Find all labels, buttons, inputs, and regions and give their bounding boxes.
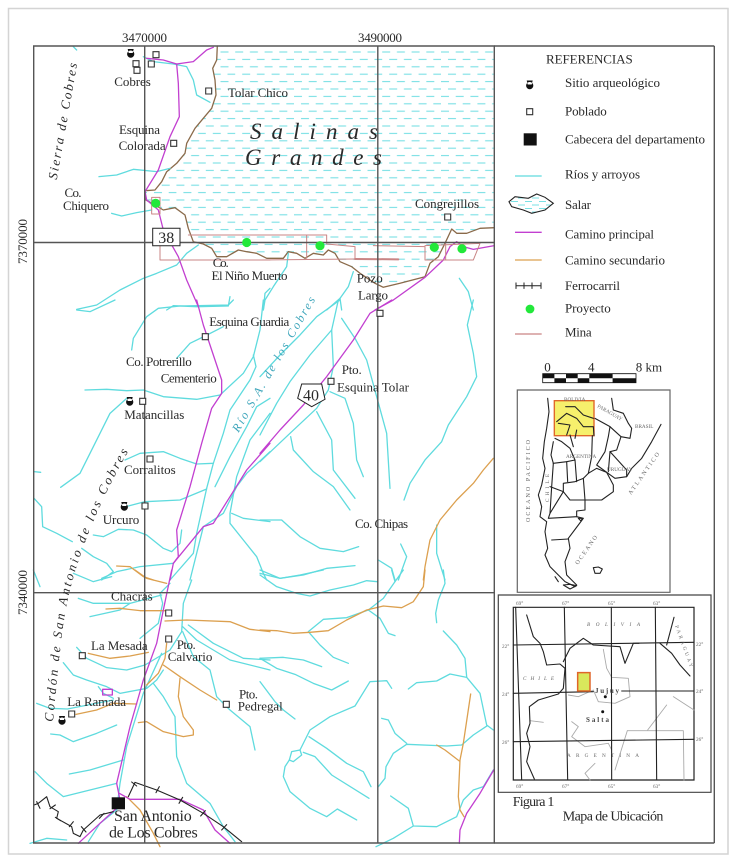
place names: Tolar Chico <box>228 85 288 100</box>
legend: Sitio arqueológico <box>565 75 660 90</box>
place names: Urcuro <box>103 512 139 527</box>
place names: 7340000 <box>15 570 30 615</box>
place names: Co. <box>213 255 229 270</box>
place names: Chiquero <box>63 198 109 213</box>
place names: La Mesada <box>91 638 148 653</box>
place names: Largo <box>358 287 388 302</box>
inset map: Argentina <box>517 390 670 592</box>
place names: Matancillas <box>124 407 184 422</box>
place names: Chacras <box>111 589 153 604</box>
secondary roads <box>76 458 493 847</box>
inset map: Argentina: OCEANO <box>575 534 600 566</box>
inset map: location detail: 22° <box>696 641 703 648</box>
place names: 3470000 <box>122 30 167 45</box>
place names <box>15 30 479 841</box>
place names: Pto. <box>342 362 362 377</box>
place names: Co. Chipas <box>355 516 408 531</box>
place names: Esquina Tolar <box>337 380 410 395</box>
inset map: location detail: Salta <box>586 716 610 724</box>
department capital marker <box>112 797 125 809</box>
place names: Calvario <box>168 649 212 664</box>
place names: Congrejillos <box>415 196 479 211</box>
range and river names: Río S.A. de los Cobres <box>228 294 318 435</box>
place names: El Niño Muerto <box>212 268 288 283</box>
inset map: location detail: 65° <box>608 783 615 790</box>
salar shoreline <box>145 46 494 287</box>
inset map: Argentina: PARAGUAY <box>596 404 623 423</box>
range and river names: Sierra de Cobres <box>45 62 80 181</box>
place names: Esquina Guardia <box>209 314 290 329</box>
inset map: Argentina: URUGUAY <box>607 467 633 473</box>
place names: Colorada <box>119 138 166 153</box>
place names: de Los Cobres <box>109 824 198 841</box>
salar: Salinas Grandes <box>145 46 494 287</box>
legend: Mina <box>565 325 592 340</box>
salt flat name: Grandes <box>245 145 382 170</box>
settlements <box>69 52 451 717</box>
place names: Co. <box>64 185 82 200</box>
inset map: Argentina: ARGENTINA <box>566 454 597 460</box>
place names: Pto. <box>177 637 196 652</box>
inset map: location detail: 65° <box>608 600 615 607</box>
salt flat name: Salinas <box>250 119 378 144</box>
legend: Camino principal <box>565 226 654 241</box>
place names: La Ramada <box>67 694 126 709</box>
range and river names: Cordón de San Antonio de los Cobres <box>45 449 128 721</box>
place names: 3490000 <box>358 30 402 45</box>
route 38 marker: 38 <box>158 230 174 247</box>
place names: Esquina <box>119 122 160 137</box>
inset map: location detail: 67° <box>562 783 569 790</box>
place names: Corralitos <box>124 462 176 477</box>
inset map: Argentina: CHILE <box>545 474 551 502</box>
legend: Camino secundario <box>565 252 665 267</box>
project points <box>151 199 467 253</box>
inset map: location detail: CHILE <box>523 676 555 682</box>
scale bar: 0 <box>544 360 551 375</box>
legend <box>509 51 705 340</box>
legend: Cabecera del departamento <box>565 131 705 146</box>
place names: Cobres <box>114 74 151 89</box>
legend: Proyecto <box>565 300 611 315</box>
scale bar: 8 km <box>636 360 662 375</box>
place names: Pozo <box>357 271 383 286</box>
inset map: location detail: ARGENTINA <box>567 753 639 759</box>
legend: Poblado <box>565 103 607 118</box>
route 38 marker <box>153 228 180 247</box>
mining concessions <box>152 197 480 260</box>
legend: REFERENCIAS <box>546 51 633 66</box>
scale bar <box>543 360 662 383</box>
place names: Pedregal <box>238 699 283 714</box>
inset map: location detail: 26° <box>502 739 509 746</box>
inset map: Argentina: ATLANTICO <box>628 451 662 496</box>
inset map: location detail: 69° <box>516 600 523 607</box>
inset map: location detail: 24° <box>696 688 703 695</box>
inset map: location detail: 24° <box>502 691 509 698</box>
legend: Salar <box>565 197 592 212</box>
scale bar: 4 <box>588 360 595 375</box>
inset map: Argentina: OCEANO PACIFICO <box>526 439 532 522</box>
main roads <box>78 47 494 843</box>
place names: San Antonio <box>114 808 192 825</box>
inset map: location detail: Jujuy <box>595 687 620 695</box>
figure caption <box>513 795 663 825</box>
inset map: location detail: 69° <box>516 783 523 790</box>
route 40 marker <box>298 384 325 407</box>
inset map: Argentina: BOLIVIA <box>564 397 586 403</box>
place names: Co. Potrerillo <box>126 354 192 369</box>
inset map: location detail: BOLIVIA <box>587 622 641 628</box>
figure caption: Mapa de Ubicación <box>563 810 663 825</box>
rivers <box>30 47 493 847</box>
inset map: location detail: 26° <box>696 736 703 743</box>
inset map: location detail: 22° <box>502 643 509 650</box>
salt flat name <box>245 119 382 170</box>
place names: Cementerio <box>161 371 217 386</box>
inset map: location detail <box>498 595 711 792</box>
figure caption: Figura 1 <box>513 795 554 810</box>
archaeological sites <box>58 49 134 725</box>
inset map: location detail: 67° <box>562 600 569 607</box>
place names: 7370000 <box>15 219 30 264</box>
inset map: Argentina: BRASIL <box>635 424 653 430</box>
legend: Ferrocarril <box>565 278 620 293</box>
railway <box>34 782 242 842</box>
inset map: location detail: PARAGUAY <box>673 625 694 668</box>
place names: Pto. <box>239 686 258 701</box>
legend: Ríos y arroyos <box>565 166 640 181</box>
inset map: location detail: 63° <box>653 600 660 607</box>
inset map: location detail: 63° <box>653 783 660 790</box>
route 40 marker: 40 <box>303 388 319 404</box>
range and river names <box>45 62 319 721</box>
